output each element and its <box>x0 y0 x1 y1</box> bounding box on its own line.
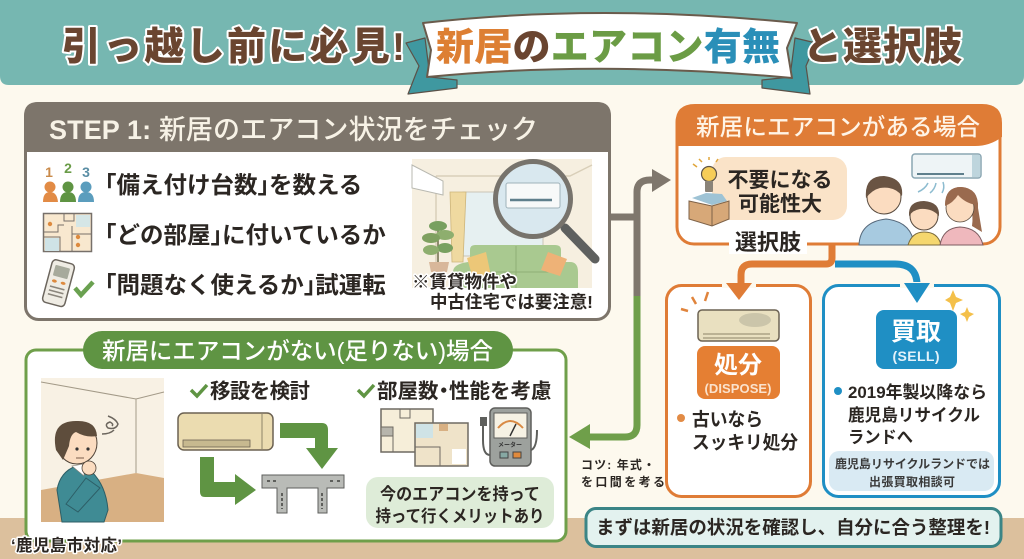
sell note: 鹿児島リサイクル <box>848 406 980 425</box>
illustration: power meter: メーター <box>498 441 522 449</box>
panel: has aircon <box>676 104 1002 255</box>
title: left part: 引っ越し前に必見! <box>62 26 405 69</box>
dispose label: (DISPOSE) <box>704 381 772 396</box>
arrow: green right-down <box>280 423 338 469</box>
icon: numbered people: 2 <box>64 160 72 176</box>
arrow: green down-right <box>200 457 256 505</box>
heading: consider relocation: 移設を検討 <box>210 380 310 403</box>
arrowhead: sell <box>904 283 930 303</box>
illustration: power meter <box>480 408 537 466</box>
has aircon heading: 新居にエアコンがある場合 <box>696 114 980 140</box>
icon: light bulb <box>693 157 718 192</box>
heading: rooms and performance: 部屋数・性能を考慮 <box>377 380 552 403</box>
sell note: ランドへ <box>848 428 913 447</box>
sell note: 2019年製以降なら <box>848 382 987 402</box>
icon: sparkles <box>945 290 974 322</box>
bottom callout: まずは新居の状況を確認し、自分に合う整理を! <box>596 517 990 538</box>
dispose note: スッキリ処分 <box>692 432 798 453</box>
tip text: を口間を考る <box>581 475 665 489</box>
dispose label: 処分 <box>714 352 762 379</box>
illustration: bracket <box>262 475 344 513</box>
dispose label <box>697 346 780 399</box>
tip text: コツ: 年式・ <box>581 457 655 472</box>
illustration: aircon beige <box>178 413 273 450</box>
icon: cardboard box <box>689 193 729 226</box>
illustration: family <box>859 176 983 245</box>
label: Kagoshima: ‘鹿児島市対応’ <box>11 535 122 555</box>
callout: likely unnecessary: 不要になる <box>728 169 832 192</box>
has aircon heading <box>676 104 1002 146</box>
tip text <box>581 457 665 489</box>
note: rented or used homes: ※賃貸物件や <box>412 272 517 292</box>
callout: merit of taking the aircon: 持って行くメリットあり <box>376 507 544 526</box>
icon: numbered people <box>43 160 94 202</box>
dispose note: 古いなら <box>692 409 763 430</box>
arrow: step 1 to no-aircon panel <box>569 296 637 449</box>
sell sub-note <box>829 451 994 491</box>
step 1 heading: STEP 1: 新居のエアコン状況をチェック <box>49 115 538 145</box>
check item: room: 「どの部屋」に付いているか <box>93 222 386 248</box>
icon: numbered people: 1 <box>45 164 53 180</box>
arrow: step 1 to has-aircon panel <box>611 169 671 296</box>
check item: count: 「備え付け台数」を数える <box>93 172 362 198</box>
check item: test run: 「問題なく使えるか」試運転 <box>93 272 386 298</box>
panel: dispose <box>666 282 810 496</box>
icon: floor plan <box>43 214 92 252</box>
sell sub-note: 出張買取相談可 <box>869 474 955 489</box>
sell label: 買取 <box>891 318 941 346</box>
icon: magnifier <box>496 162 595 259</box>
illustration: room under magnifier <box>412 159 595 288</box>
panel: no aircon <box>26 331 566 541</box>
icon: remote and check <box>42 259 93 307</box>
arrow: options to dispose <box>726 245 832 300</box>
panel: step 1 check <box>24 102 611 320</box>
header banner <box>0 0 1024 94</box>
panel: sell <box>824 282 1000 496</box>
sell label <box>876 310 957 369</box>
step 1 heading <box>24 102 611 152</box>
illustration: old aircon <box>681 292 779 341</box>
icon: wall aircon <box>912 154 981 193</box>
dispose note <box>677 409 798 453</box>
no aircon heading <box>83 331 513 369</box>
label: options: 選択肢 <box>735 230 801 255</box>
sell sub-note: 鹿児島リサイクルランドでは <box>835 456 990 471</box>
illustration: floor plans <box>381 409 468 466</box>
note: rented or used homes: 中古住宅では要注意! <box>430 292 593 312</box>
callout: merit of taking the aircon: 今のエアコンを持って <box>380 484 540 504</box>
arrow: options to sell <box>835 264 917 286</box>
callout: merit of taking the aircon <box>366 477 554 528</box>
callout: likely unnecessary <box>712 157 847 220</box>
ribbon with highlighted title <box>406 13 816 94</box>
note: rented or used homes <box>412 272 593 312</box>
title: right part: と選択肢 <box>803 26 962 69</box>
illustration: thinking person <box>41 378 164 522</box>
sell label: (SELL) <box>892 348 940 364</box>
ribbon with highlighted title: 新居のエアコン有無 <box>436 27 780 69</box>
bottom callout <box>586 508 1001 546</box>
sell note <box>834 382 987 447</box>
no aircon heading: 新居にエアコンがない(足りない)場合 <box>102 338 493 364</box>
callout: likely unnecessary: 可能性大 <box>738 193 822 216</box>
icon: numbered people: 3 <box>82 164 90 180</box>
